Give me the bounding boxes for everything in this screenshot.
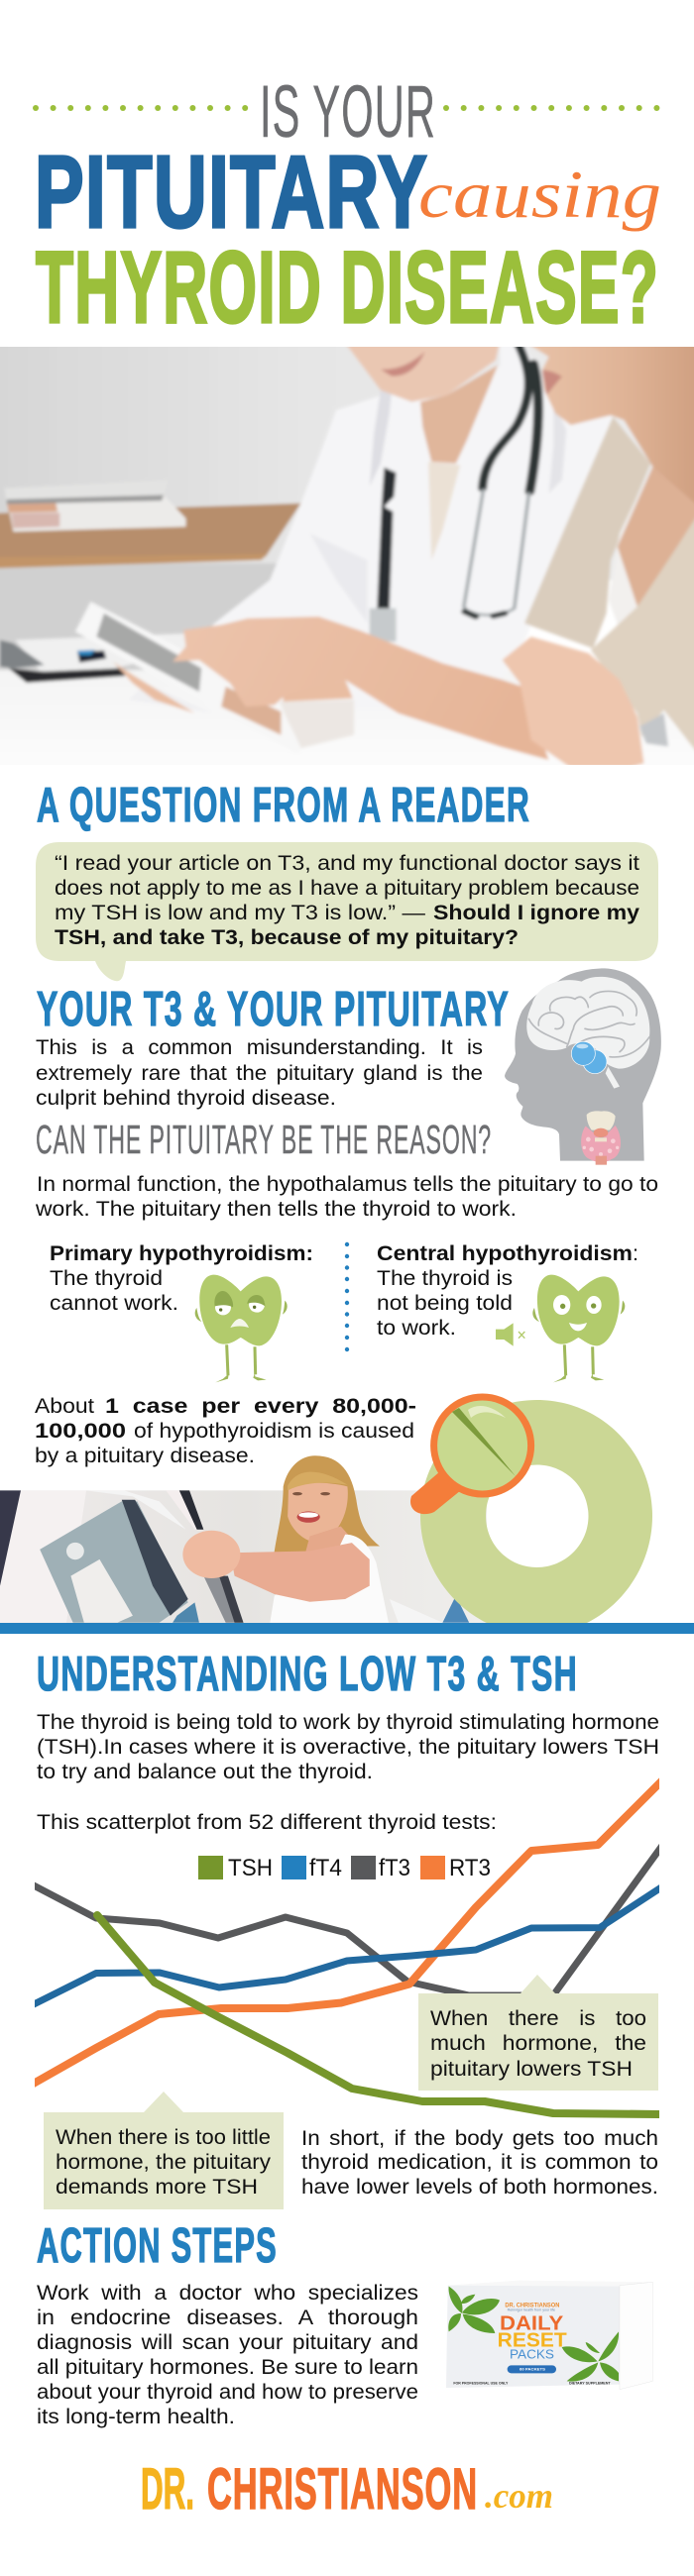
logo: dr christianson dot com <box>141 2457 553 2522</box>
text: one case per every 80,000-100,000 <box>35 1393 416 1467</box>
callout: too much hormone: When there is too <box>430 2005 646 2030</box>
icon: tired thyroid character <box>195 1275 288 1382</box>
magnifier <box>410 1397 531 1514</box>
divider: blue dotted line <box>345 1242 349 1351</box>
text: action steps body: all pituitary hormones. Be sure to learn <box>37 2354 418 2379</box>
callout: too much hormone: much hormone, the <box>430 2030 646 2055</box>
heading: action steps: ACTION STEPS <box>37 2219 278 2273</box>
thyroid gland <box>581 1111 621 1165</box>
question text: TSH, and take T3, because of my pituitary? <box>55 924 519 949</box>
product box: daily reset packs <box>446 2281 652 2390</box>
box text: FOR PROFESSIONAL USE ONLY <box>453 2382 509 2386</box>
central text: not being told <box>377 1290 513 1315</box>
chart: hormone line chart <box>30 1778 664 2114</box>
text: thyroid stimulating hormone: The thyroid is being told to work by thyroid stimulating hormone <box>37 1709 659 1734</box>
callout: too much hormone <box>418 1975 658 2091</box>
logo: dr christianson dot com: DR. <box>141 2457 194 2522</box>
text: in short: In short, if the body gets too much <box>301 2125 658 2150</box>
primary text: The thyroid <box>50 1265 163 1290</box>
title line: pituitary: PITUITARY <box>35 135 428 249</box>
lines <box>30 1778 664 2114</box>
leaves <box>448 2287 619 2382</box>
text: in short: thyroid medication, it is common to <box>301 2149 658 2174</box>
text: action steps body: in endocrine diseases. A thorough <box>37 2305 418 2329</box>
callout: too little hormone <box>44 2092 284 2209</box>
primary text: cannot work. <box>50 1290 178 1315</box>
text: one case per every 80,000-100,000: 1 case per every 80,000- <box>105 1393 416 1418</box>
divider band <box>0 1623 694 1634</box>
box text: DR. CHRISTIANSON <box>505 2302 559 2308</box>
text: action steps body <box>37 2280 418 2428</box>
text: in short <box>301 2125 658 2199</box>
text: action steps body: diagnosis will scan your pituitary and <box>37 2329 418 2354</box>
text: one case per every 80,000-100,000: About <box>35 1393 94 1418</box>
text: common misunderstanding: culprit behind thyroid disease. <box>36 1085 336 1110</box>
pituitary gland <box>571 1041 607 1074</box>
panel: primary hypothyroidism <box>50 1240 313 1382</box>
legend: fT3 <box>379 1855 410 1881</box>
icon: head with brain and thyroid <box>505 968 661 1165</box>
text: one case per every 80,000-100,000: of hypothyroidism is caused <box>134 1418 414 1443</box>
box text: DAILY <box>500 2313 563 2335</box>
logo: dr christianson dot com: .com <box>485 2476 553 2516</box>
text: thyroid stimulating hormone <box>37 1709 659 1783</box>
central text <box>377 1240 638 1340</box>
title line: causing: causing <box>418 157 661 232</box>
donut <box>420 1400 652 1635</box>
icon: awake thyroid character <box>532 1275 625 1382</box>
title dotted rule left <box>33 105 248 111</box>
box text <box>453 2302 611 2386</box>
primary text: Primary hypothyroidism: <box>50 1240 313 1265</box>
text: one case per every 80,000-100,000: 100,000 <box>35 1418 126 1443</box>
box text: Reinvigor health from your life <box>508 2308 555 2312</box>
title <box>33 70 661 344</box>
central text: : <box>633 1240 638 1265</box>
panel: central hypothyroidism <box>377 1240 638 1382</box>
text: common misunderstanding <box>36 1034 483 1110</box>
brain <box>526 977 649 1089</box>
legend: RT3 <box>449 1855 491 1881</box>
box text: PACKS <box>510 2347 554 2362</box>
central text: Central hypothyroidism <box>377 1240 633 1265</box>
box text: RESET <box>498 2329 567 2351</box>
text: action steps body: about your thyroid and how to preserve <box>37 2379 418 2404</box>
question text: “I read your article on T3, and my functional doctor says it <box>55 850 639 875</box>
text: normal function <box>35 1171 658 1221</box>
callout: too much hormone: pituitary lowers TSH <box>430 2056 633 2081</box>
icon: muted speaker <box>496 1323 524 1346</box>
photo: smiling woman on exercise machine <box>0 1455 487 1623</box>
central text: The thyroid is <box>377 1265 513 1290</box>
speech bubble <box>36 842 658 981</box>
title dotted rule right <box>443 105 659 111</box>
callout: too little hormone: hormone, the pituitary <box>56 2149 271 2174</box>
box text: DIETARY SUPPLEMENT <box>569 2382 611 2386</box>
callout: too little hormone: demands more TSH <box>56 2174 258 2199</box>
box text: 60 PACKETS <box>520 2368 546 2372</box>
text: in short: have lower levels of both hormones. <box>301 2174 658 2199</box>
legend: TSH <box>228 1855 273 1881</box>
panel: reader question bubble <box>36 842 658 981</box>
text: action steps body: Work with a doctor who specializes <box>37 2280 418 2305</box>
text: thyroid stimulating hormone: (TSH).In cases where it is overactive, the pituitary lowers TSH <box>37 1734 659 1759</box>
primary text <box>50 1240 313 1315</box>
question text: does not apply to me as I have a pituitary problem because <box>55 875 639 900</box>
question text <box>55 850 639 949</box>
text: scatterplot intro: This scatterplot from 52 different thyroid tests: <box>37 1809 497 1834</box>
text: normal function: work. The pituitary then tells the thyroid to work. <box>35 1196 517 1221</box>
chart: donut with magnifier <box>410 1397 652 1635</box>
photo: doctor and patient with tablet <box>0 340 694 775</box>
text: thyroid stimulating hormone: to try and balance out the thyroid. <box>37 1759 373 1783</box>
legend <box>198 1855 491 1881</box>
logo: dr christianson dot com: CHRISTIANSON <box>207 2457 478 2522</box>
question text: my TSH is low and my T3 is low.” — <box>55 900 425 924</box>
question text: Should I ignore my <box>433 900 639 924</box>
text: action steps body: its long-term health. <box>37 2404 235 2428</box>
legend: fT4 <box>309 1855 342 1881</box>
text: normal function: In normal function, the hypothalamus tells the pituitary to go to <box>37 1171 658 1196</box>
title line: is your: IS YOUR <box>260 70 436 153</box>
text: one case per every 80,000-100,000: by a pituitary disease. <box>35 1443 255 1467</box>
text: common misunderstanding: This is a common misunderstanding. It is <box>36 1034 483 1059</box>
callout: too little hormone: When there is too little <box>56 2124 271 2149</box>
central text: to work. <box>377 1315 456 1340</box>
text: common misunderstanding: extremely rare that the pituitary gland is the <box>36 1060 483 1085</box>
